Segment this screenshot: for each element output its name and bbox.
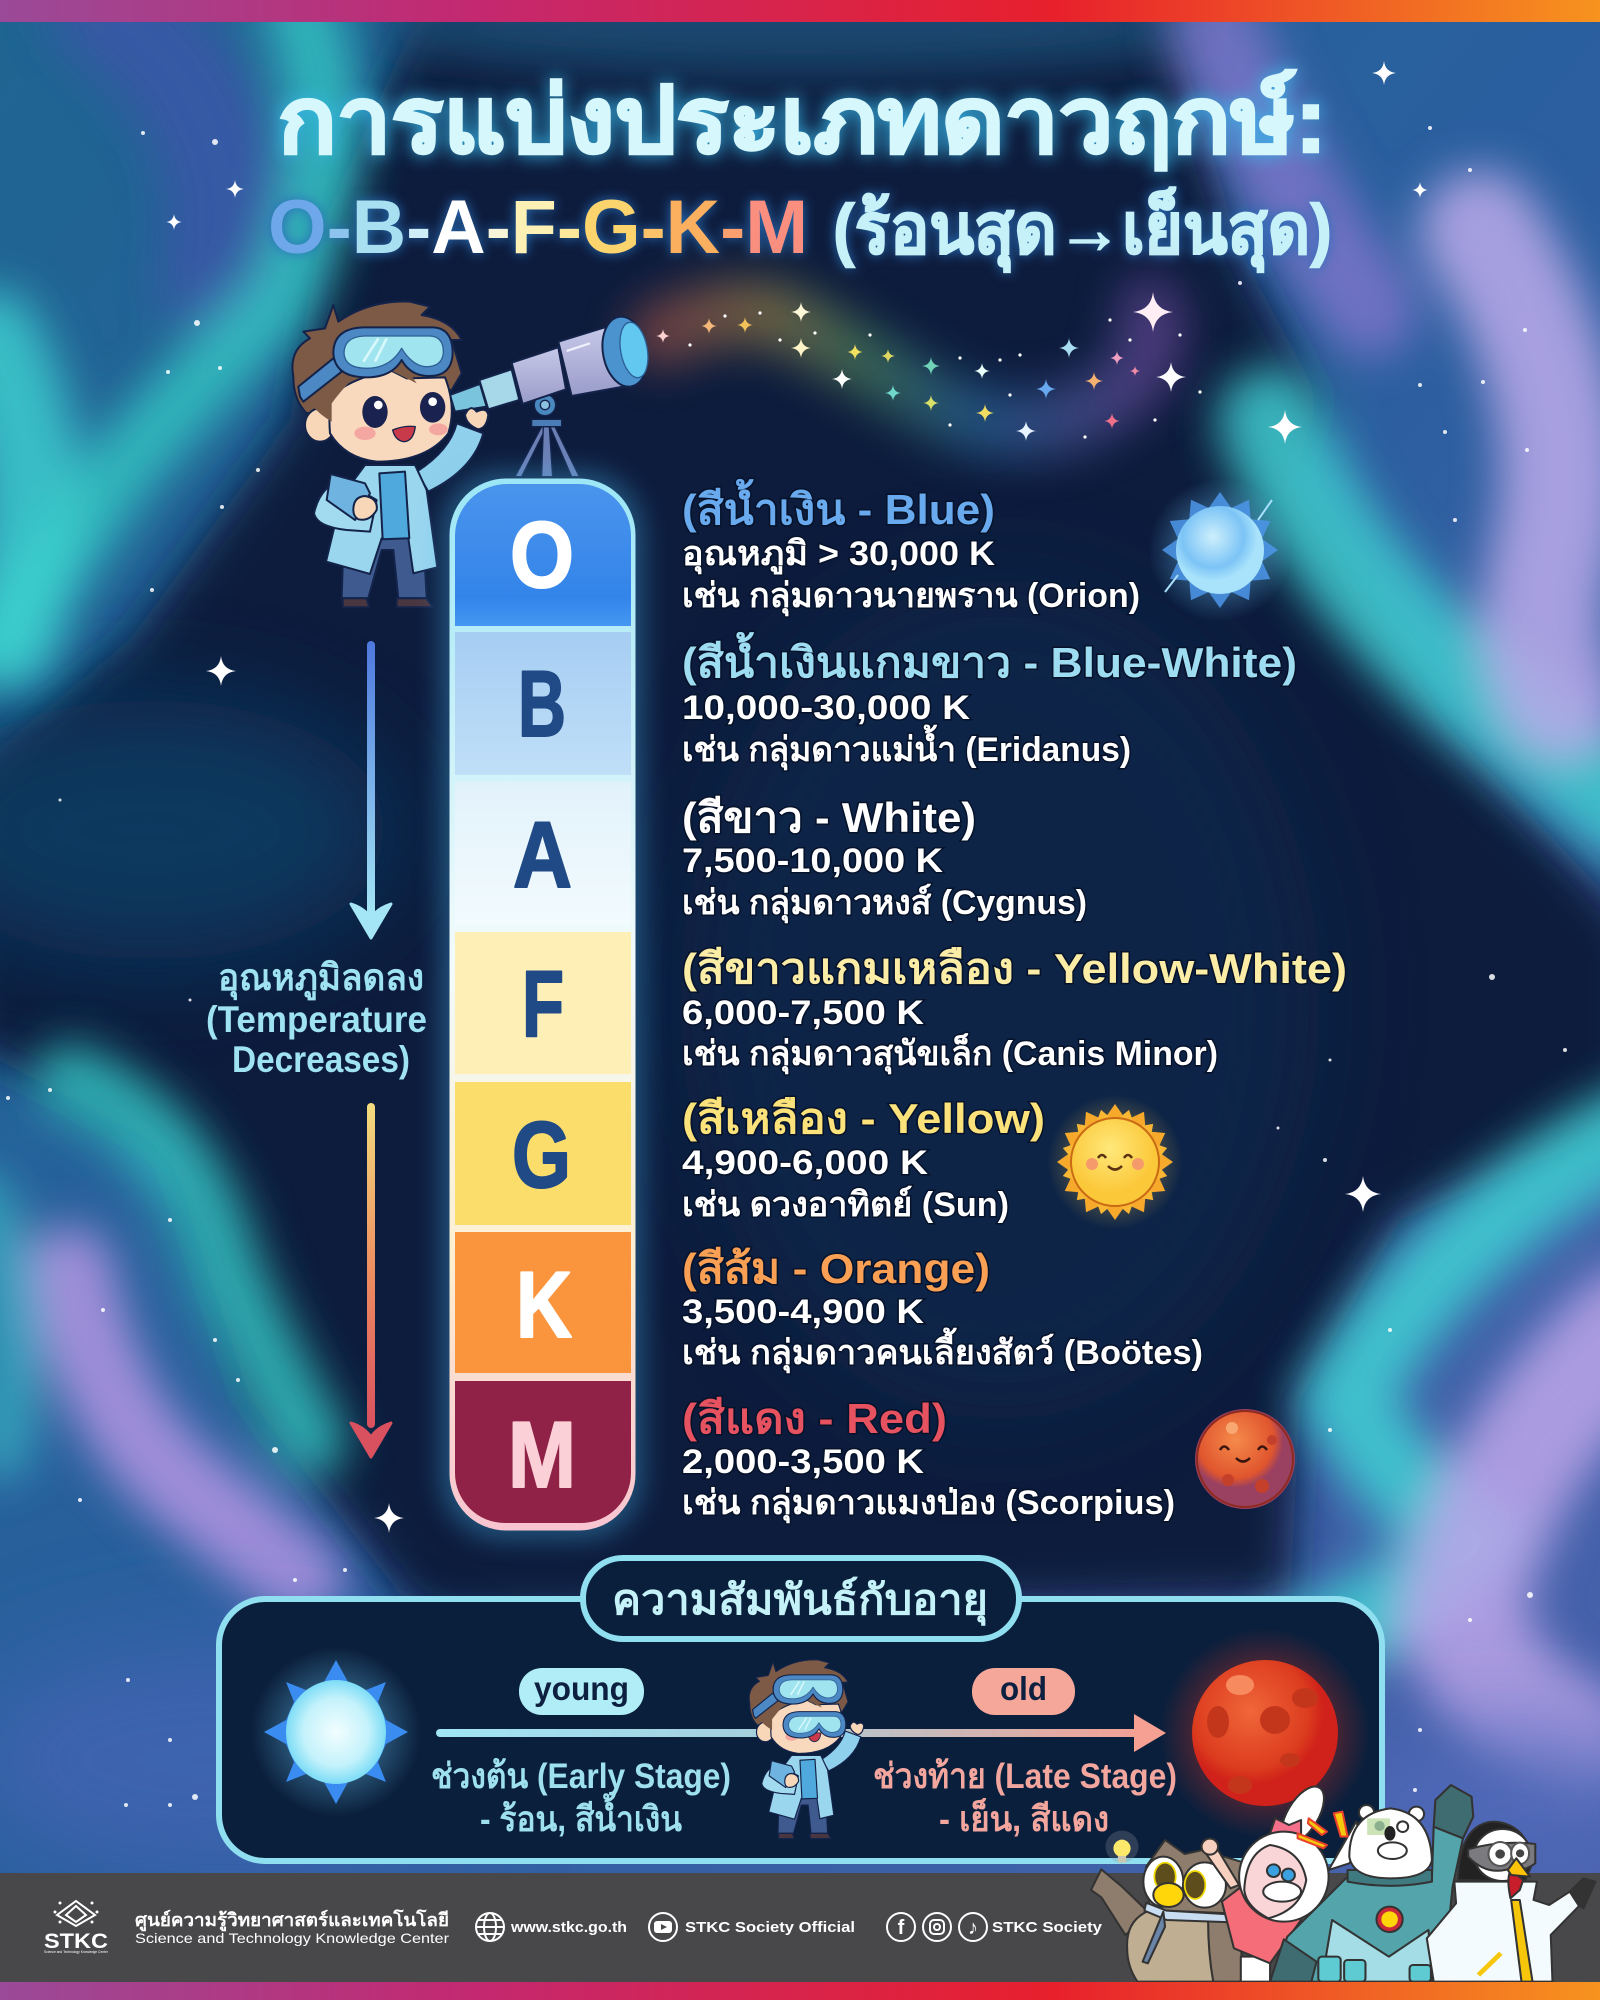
title bbox=[268, 69, 1332, 273]
icon: globe bbox=[476, 1913, 504, 1941]
STKC logo: Science and Technology Knowledge Center bbox=[44, 1949, 109, 1954]
late stage text: ช่วงท้าย (Late Stage) bbox=[873, 1757, 1177, 1796]
icon: young blue star bbox=[251, 1647, 421, 1817]
row A: เช่น กลุ่มดาวหงส์ (Cygnus) bbox=[682, 883, 1087, 924]
row F bbox=[682, 945, 1347, 1075]
panel heading pill: ความสัมพันธ์กับอายุ bbox=[612, 1576, 988, 1626]
social name: STKC Society bbox=[992, 1919, 1103, 1936]
title line 2: spectral sequence: O-B-A-F-G-K-M bbox=[268, 185, 808, 270]
STKC logo bbox=[44, 1901, 109, 1954]
row O: (สีน้ำเงิน - Blue) bbox=[682, 478, 995, 533]
temperature label bbox=[206, 957, 427, 1080]
scientist character bbox=[292, 302, 488, 607]
mascot: rabbit bbox=[1202, 1780, 1363, 1982]
mini scientist bbox=[749, 1660, 864, 1839]
class A bbox=[455, 782, 631, 925]
footer band bbox=[0, 1873, 1600, 1982]
class M: M bbox=[508, 1402, 576, 1507]
youtube name: STKC Society Official bbox=[685, 1919, 855, 1936]
row M bbox=[682, 1395, 1175, 1524]
temperature label: Decreases) bbox=[232, 1039, 410, 1080]
class F: F bbox=[522, 951, 564, 1056]
old badge bbox=[972, 1668, 1075, 1715]
row G: เช่น ดวงอาทิตย์ (Sun) bbox=[682, 1185, 1009, 1224]
panel: relation with age bbox=[219, 1558, 1382, 1861]
rainbow star trail bbox=[656, 292, 1202, 441]
organisation name: Science and Technology Knowledge Center bbox=[135, 1930, 449, 1946]
mascot: owl bbox=[1091, 1840, 1246, 1982]
row G: 4,900-6,000 K bbox=[682, 1144, 928, 1182]
row B: เช่น กลุ่มดาวแม่น้ำ (Eridanus) bbox=[682, 724, 1131, 771]
class G: G bbox=[512, 1102, 571, 1207]
class K bbox=[455, 1232, 631, 1373]
mascot: penguin bbox=[1427, 1822, 1596, 1982]
class A: A bbox=[513, 802, 572, 907]
row B: 10,000-30,000 K bbox=[682, 689, 971, 727]
row M: (สีแดง - Red) bbox=[682, 1395, 947, 1442]
class B bbox=[455, 632, 631, 775]
young/old arrow bbox=[436, 1714, 1166, 1752]
row B bbox=[682, 631, 1297, 771]
icon: red dwarf bbox=[1195, 1409, 1295, 1509]
row O: เช่น กลุ่มดาวนายพราน (Orion) bbox=[682, 577, 1140, 617]
spectral class column bbox=[442, 472, 642, 1538]
organisation name: ศูนย์ความรู้วิทยาศาสตร์และเทคโนโลยี bbox=[135, 1909, 449, 1932]
website: www.stkc.go.th bbox=[510, 1919, 627, 1936]
class descriptions bbox=[682, 478, 1347, 1524]
row F: (สีขาวแกมเหลือง - Yellow-White) bbox=[682, 945, 1347, 992]
row O: อุณหภูมิ > 30,000 K bbox=[682, 535, 995, 575]
tripod bbox=[515, 394, 579, 477]
organisation name bbox=[135, 1909, 449, 1946]
row G bbox=[682, 1095, 1045, 1224]
title line 1: การแบ่งประเภทดาวฤกษ์: bbox=[278, 69, 1327, 172]
icons: social bbox=[887, 1913, 987, 1941]
icons: social: ♪ bbox=[968, 1917, 978, 1939]
temperature decrease arrows and label bbox=[206, 641, 427, 1457]
temperature label: (Temperature bbox=[206, 999, 427, 1040]
early stage text: - ร้อน, สีน้ำเงิน bbox=[480, 1793, 682, 1839]
class O: O bbox=[510, 502, 574, 607]
row M: เช่น กลุ่มดาวแมงป่อง (Scorpius) bbox=[682, 1484, 1175, 1524]
mascots bbox=[1091, 1780, 1596, 1982]
icon: light bulb bbox=[1105, 1831, 1139, 1863]
late stage text: - เย็น, สีแดง bbox=[939, 1797, 1109, 1839]
row A: (สีขาว - White) bbox=[682, 794, 976, 841]
telescope tube bbox=[450, 313, 653, 412]
row K: (สีส้ม - Orange) bbox=[682, 1245, 990, 1292]
bottom brand bar bbox=[0, 1982, 1600, 2000]
young badge: young bbox=[534, 1670, 629, 1707]
arrow lower bbox=[351, 1103, 391, 1457]
icon: old red star bbox=[1160, 1628, 1370, 1838]
top brand bar bbox=[0, 0, 1600, 22]
late stage text bbox=[873, 1757, 1177, 1839]
class B: B bbox=[518, 651, 566, 756]
row K bbox=[682, 1245, 1203, 1374]
panel heading pill bbox=[583, 1558, 1019, 1639]
young badge bbox=[519, 1668, 644, 1715]
row A: 7,500-10,000 K bbox=[682, 842, 943, 880]
icon: sun bbox=[1047, 1094, 1183, 1230]
temperature label: อุณหภูมิลดลง bbox=[218, 957, 424, 1001]
early stage text: ช่วงต้น (Early Stage) bbox=[431, 1757, 731, 1796]
class K: K bbox=[516, 1252, 572, 1357]
class M bbox=[455, 1381, 631, 1523]
mascot: bear bbox=[1270, 1785, 1473, 1982]
row K: 3,500-4,900 K bbox=[682, 1293, 924, 1331]
row M: 2,000-3,500 K bbox=[682, 1443, 924, 1481]
old badge: old bbox=[1000, 1670, 1047, 1707]
title line 2: hot to cool: (ร้อนสุด→เย็นสุด) bbox=[833, 186, 1332, 273]
early stage text bbox=[431, 1757, 731, 1839]
row B: (สีน้ำเงินแกมขาว - Blue-White) bbox=[682, 631, 1297, 686]
row F: เช่น กลุ่มดาวสุนัขเล็ก (Canis Minor) bbox=[682, 1032, 1218, 1075]
class O bbox=[455, 484, 631, 626]
row A bbox=[682, 794, 1087, 924]
class G bbox=[455, 1082, 631, 1225]
panel body bbox=[219, 1599, 1382, 1861]
icon: youtube bbox=[649, 1913, 677, 1941]
row O bbox=[682, 478, 1140, 617]
class F bbox=[455, 932, 631, 1074]
row F: 6,000-7,500 K bbox=[682, 994, 924, 1032]
row K: เช่น กลุ่มดาวคนเลี้ยงสัตว์ (Boötes) bbox=[682, 1327, 1203, 1374]
icons: social: f bbox=[898, 1917, 905, 1939]
STKC logo: STKC bbox=[44, 1930, 108, 1953]
row G: (สีเหลือง - Yellow) bbox=[682, 1095, 1045, 1142]
telescope on tripod bbox=[450, 313, 653, 477]
icon: blue star bbox=[1148, 478, 1292, 622]
arrow upper bbox=[351, 641, 391, 938]
